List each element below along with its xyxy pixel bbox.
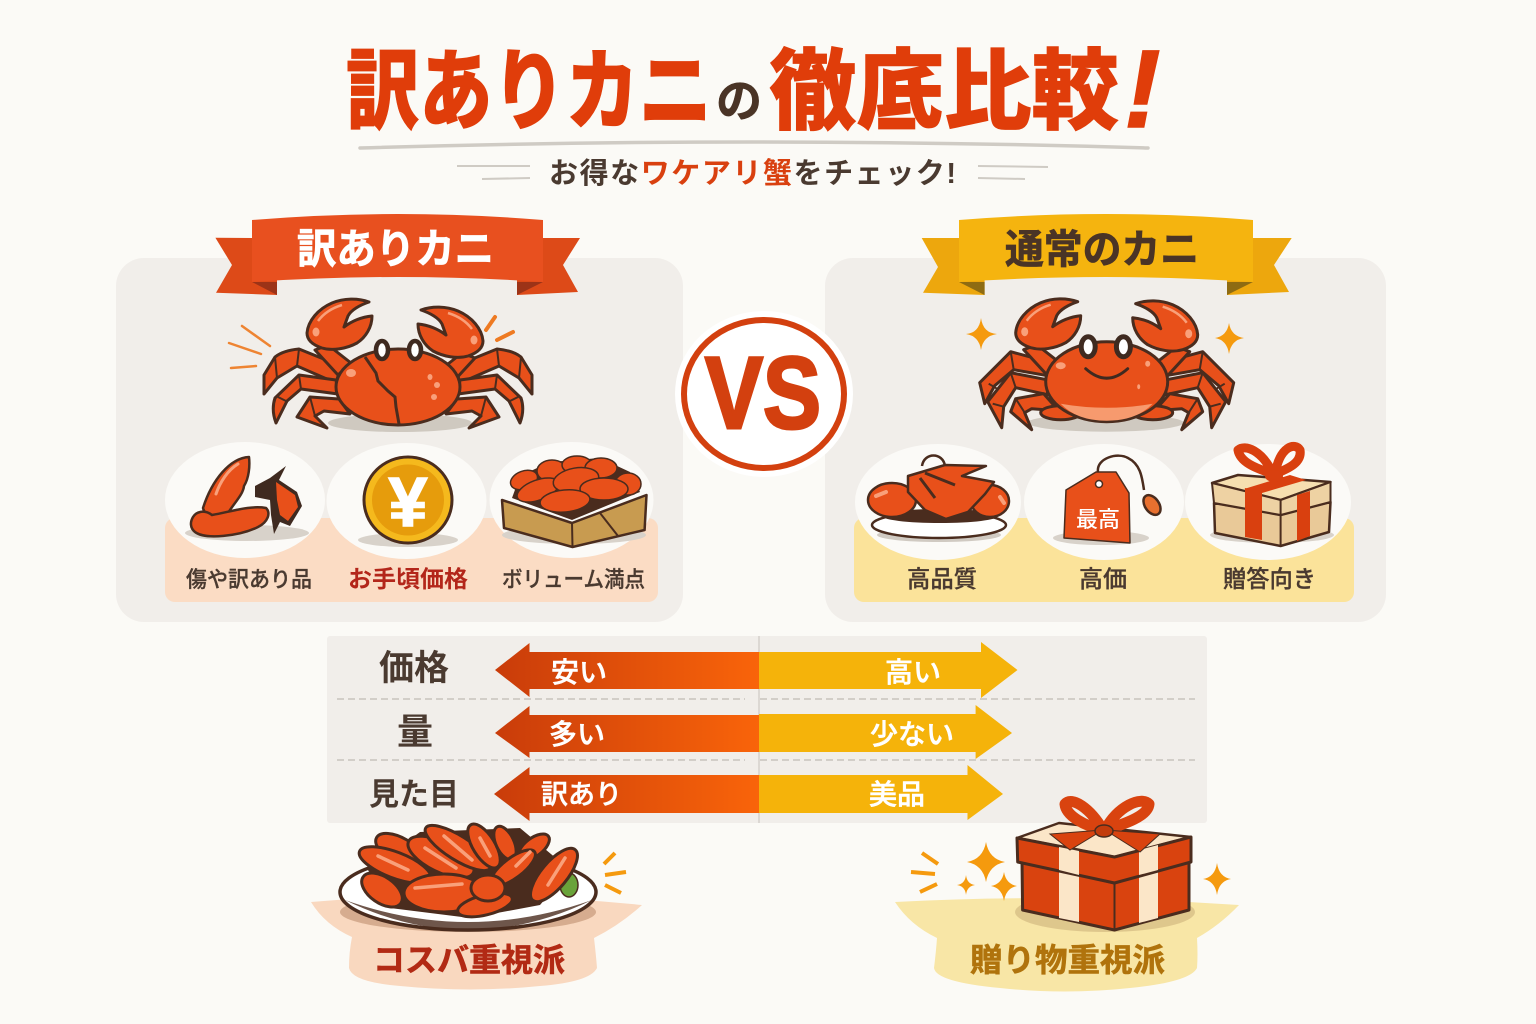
row: 量	[397, 705, 1012, 759]
icon: sparkle right	[1215, 323, 1244, 354]
arrow: 高い: 高い	[885, 657, 941, 688]
label: 贈り物重視派: 贈り物重視派	[970, 942, 1165, 978]
arrow: 美品: 美品	[869, 779, 925, 810]
arrow: 安い: 安い	[551, 657, 607, 688]
label: 傷や訳あり品: 傷や訳あり品	[186, 567, 312, 592]
label: 贈答向き: 贈答向き	[1223, 565, 1316, 592]
title underline	[360, 142, 1148, 148]
icon: happy crab	[980, 299, 1234, 432]
subtitle	[457, 157, 1048, 190]
item: price tag	[1024, 444, 1184, 592]
arrow: 高い	[759, 642, 1018, 698]
panel strip	[165, 518, 658, 602]
arrow: 訳あり	[494, 767, 759, 821]
item: broken crab	[165, 442, 325, 592]
label: 高品質: 高品質	[907, 566, 977, 592]
pedestal: 贈り物重視派	[895, 898, 1239, 992]
icon: red gift box	[1015, 801, 1195, 932]
ribbon: 通常のカニ: 通常のカニ	[1005, 228, 1199, 272]
title: !	[1124, 28, 1161, 151]
panel: 訳ありカニ	[116, 214, 683, 622]
arrow: 多い	[495, 706, 759, 758]
comparison table	[327, 636, 1207, 823]
VS badge: VS	[705, 336, 821, 450]
panel: 通常のカニ	[825, 214, 1386, 622]
item: gift box	[1185, 444, 1351, 592]
icon: crab legs plate	[340, 818, 596, 932]
label: コスバ重視派: コスバ重視派	[373, 942, 565, 978]
row: 見た目	[369, 765, 1003, 821]
arrow: 美品	[759, 765, 1003, 820]
arrow: 訳あり: 訳あり	[541, 780, 622, 810]
row: 見た目: 見た目	[369, 777, 459, 812]
title: の	[716, 75, 762, 127]
label: ボリューム満点: ボリューム満点	[502, 567, 645, 592]
arrow: 多い: 多い	[549, 719, 605, 750]
ribbon: 訳ありカニ	[215, 214, 580, 295]
row: 価格	[379, 642, 1018, 698]
title: 訳ありカニ	[346, 42, 712, 141]
arrow: 安い	[495, 643, 759, 697]
VS badge	[675, 311, 853, 477]
item: yen coin	[326, 443, 486, 592]
title: 徹底比較	[769, 42, 1119, 141]
icon: sparkle left	[966, 318, 997, 350]
icon: spark lines left	[604, 853, 626, 893]
item: yen coin: ¥	[389, 463, 428, 541]
title	[346, 28, 1161, 151]
icon: cracked crab	[264, 299, 532, 432]
icon: sparkles and lines around gift	[911, 842, 1231, 901]
row: 価格: 価格	[379, 649, 449, 688]
label: 高価: 高価	[1079, 566, 1127, 592]
row: 量: 量	[397, 711, 433, 752]
arrow: 少ない	[759, 705, 1012, 759]
ribbon: 訳ありカニ: 訳ありカニ	[297, 226, 494, 272]
icon: impact lines	[229, 317, 513, 368]
pedestal: コスバ重視派	[311, 896, 642, 990]
subtitle: お得なワケアリ蟹をチェック!	[549, 157, 956, 190]
ribbon: 通常のカニ	[922, 214, 1292, 295]
arrow: 少ない: 少ない	[870, 719, 954, 750]
item: crab plate	[855, 444, 1021, 592]
panel strip	[854, 518, 1354, 602]
item: crab box	[490, 442, 654, 592]
label: お手頃価格: お手頃価格	[348, 566, 469, 592]
item: price tag: 最高	[1076, 507, 1120, 532]
